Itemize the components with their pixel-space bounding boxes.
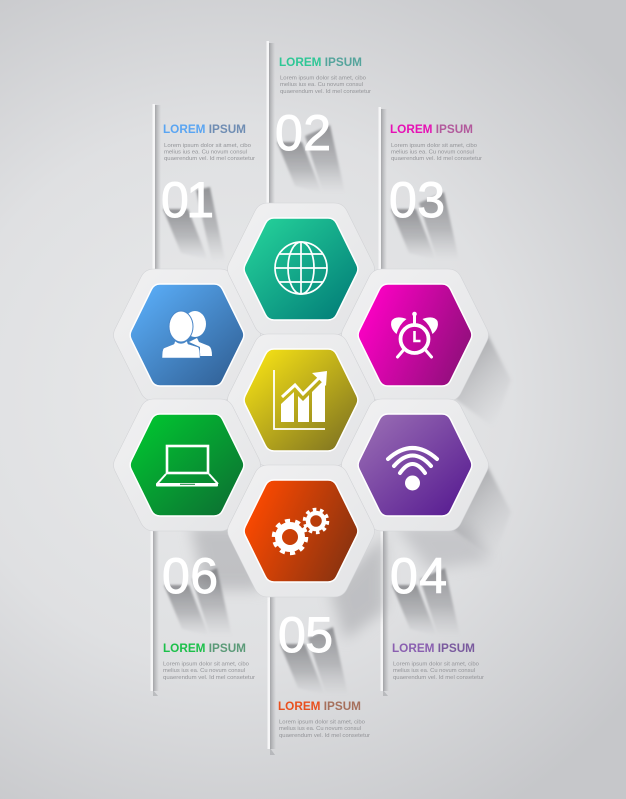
vertical line 03	[378, 107, 387, 275]
hexagon: green globe	[228, 203, 374, 335]
icon: alarm clock	[391, 312, 438, 357]
text block 06	[163, 641, 255, 681]
text block 06: LOREM IPSUM	[163, 641, 246, 655]
text block 02: LOREM IPSUM	[279, 55, 362, 69]
vertical line 06	[150, 525, 159, 696]
text block 05: LOREM IPSUM	[278, 699, 361, 713]
text block 05	[278, 699, 370, 739]
vertical line 01	[152, 104, 161, 275]
hexagon: green laptop	[114, 399, 260, 531]
text block 04	[392, 641, 484, 681]
text block 04: quaerendum vel. Id mel consetetur	[393, 675, 484, 681]
text block 03: quaerendum vel. Id mel consetetur	[391, 156, 482, 162]
number 01: 01	[161, 172, 214, 228]
hexagon: blue people	[114, 269, 260, 401]
text block 05: melius ius ea. Cu novum consul	[279, 726, 361, 732]
vertical line 02	[266, 41, 275, 208]
number 05: 05	[278, 607, 333, 663]
text block 02: melius ius ea. Cu novum consul	[280, 82, 363, 88]
number 06: 06	[162, 548, 218, 604]
text block 04: melius ius ea. Cu novum consul	[393, 668, 475, 674]
icon: wifi	[388, 448, 437, 490]
text block 02: quaerendum vel. Id mel consetetur	[280, 89, 371, 95]
text block 01: melius ius ea. Cu novum consul	[164, 150, 247, 156]
text block 01: LOREM IPSUM	[163, 122, 246, 136]
text block 03: Lorem ipsum dolor sit amet, cibo	[391, 143, 477, 149]
soft shadows under the hexagon group	[190, 525, 490, 640]
text block 06: melius ius ea. Cu novum consul	[163, 668, 245, 674]
text block 04: Lorem ipsum dolor sit amet, cibo	[393, 662, 479, 668]
text block 04: LOREM IPSUM	[392, 641, 475, 655]
text block 05: Lorem ipsum dolor sit amet, cibo	[279, 720, 365, 726]
text block 06: quaerendum vel. Id mel consetetur	[163, 675, 255, 681]
icon: growth chart	[274, 370, 327, 429]
text block 05: quaerendum vel. Id mel consetetur	[279, 733, 370, 739]
icon: people	[162, 311, 212, 358]
number 02: 02	[275, 105, 331, 161]
number 03: 03	[389, 172, 445, 228]
text block 01: Lorem ipsum dolor sit amet, cibo	[164, 143, 251, 149]
text block 02: Lorem ipsum dolor sit amet, cibo	[280, 76, 366, 82]
shadows of hexagons	[450, 333, 511, 560]
icon: laptop	[156, 446, 218, 486]
text block 01: quaerendum vel. Id mel consetetur	[164, 156, 255, 162]
shadows of numbers	[163, 125, 460, 695]
text block 03: melius ius ea. Cu novum consul	[391, 150, 474, 156]
text block 02	[279, 55, 371, 95]
text block 03: LOREM IPSUM	[390, 122, 473, 136]
hexagon: purple wifi	[342, 399, 488, 531]
number 04: 04	[390, 548, 447, 604]
hexagon: magenta clock	[342, 269, 488, 401]
hexagon: yellow chart	[228, 334, 374, 466]
text block 06: Lorem ipsum dolor sit amet, cibo	[163, 662, 249, 668]
vertical line 04	[380, 525, 389, 696]
text block 01	[163, 122, 255, 162]
vertical line 05	[268, 590, 276, 755]
text block 03	[390, 122, 482, 162]
icon: gears	[274, 510, 328, 553]
hexagon: orange gears	[228, 465, 374, 597]
icon: globe	[275, 242, 327, 294]
